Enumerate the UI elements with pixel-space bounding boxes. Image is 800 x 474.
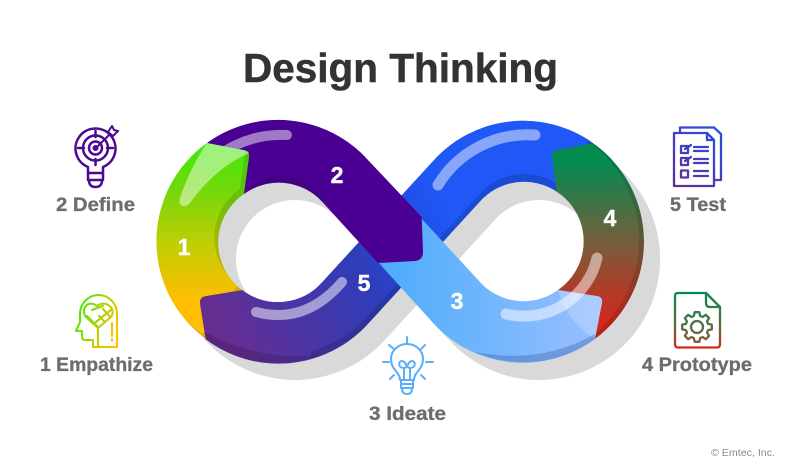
- icon: test documents checklist: [674, 128, 721, 186]
- label: 5 Test: 5 Test: [670, 195, 727, 216]
- title: Design Thinking: [243, 45, 558, 91]
- label: 1 Empathize: 1 Empathize: [40, 355, 153, 376]
- segment 5: blue to purple band: [200, 113, 593, 364]
- number 5: 5: [358, 270, 371, 296]
- label: 2 Define: 2 Define: [56, 195, 135, 216]
- icon: empathize head with heart: [76, 295, 117, 347]
- icon: ideate light bulb: [383, 337, 433, 394]
- number 1: 1: [178, 234, 191, 260]
- number 4: 4: [604, 205, 617, 231]
- copyright note: © Emtec, Inc.: [711, 448, 775, 459]
- infinity loop shadow: [205, 169, 629, 349]
- segment 4: green to red band: [547, 141, 644, 339]
- icon: prototype document with gear: [675, 293, 720, 348]
- highlight on segment 5 top: [438, 135, 535, 185]
- icon: define target bulb: [76, 126, 118, 187]
- number 3: 3: [451, 288, 463, 314]
- infinity loop: [156, 120, 644, 364]
- segment 1: green to yellow band: [152, 138, 249, 339]
- label: 3 Ideate: 3 Ideate: [369, 404, 446, 425]
- highlight on segment 3 and 4: [506, 258, 597, 316]
- segment 3: light blue band: [378, 217, 602, 363]
- segment 2: dark purple band: [207, 120, 423, 263]
- label: 4 Prototype: 4 Prototype: [642, 355, 752, 376]
- segment 5 head: [200, 290, 319, 364]
- number 2: 2: [331, 162, 343, 188]
- highlight on segment 5 bottom: [256, 282, 342, 315]
